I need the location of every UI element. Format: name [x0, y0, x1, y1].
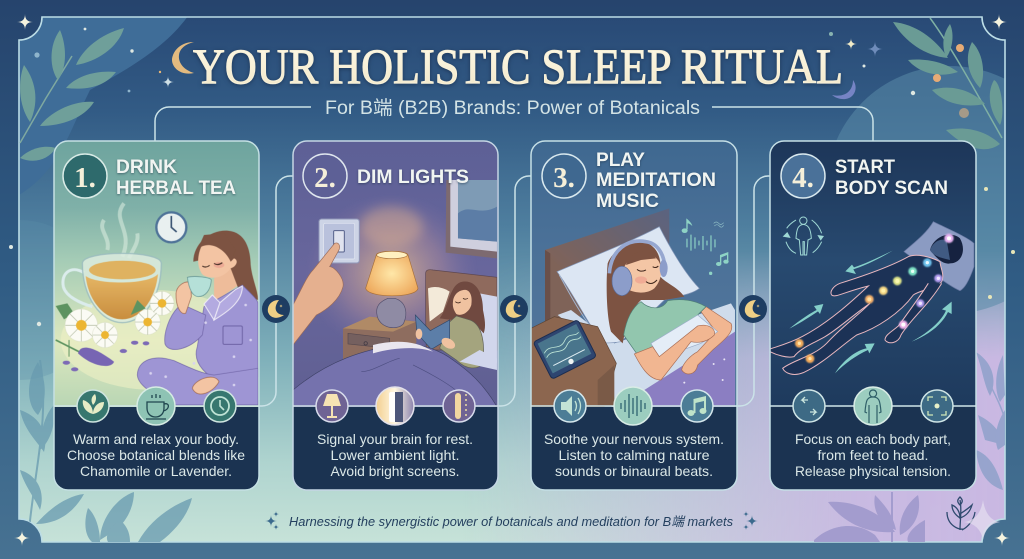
description text: Listen to calming nature [558, 447, 710, 463]
heading [835, 157, 948, 199]
heading: PLAY [596, 150, 645, 171]
heading: DIM LIGHTS [357, 167, 469, 188]
icon: lamp [316, 390, 348, 422]
icon: small blue crescent [832, 80, 856, 99]
icon: tea cup [137, 387, 175, 425]
number badge 2: 2. [314, 162, 336, 194]
botanical: top-right leaves [893, 18, 1002, 149]
footer tagline: Harnessing the synergistic power of botanicals and meditation for B端 markets [289, 514, 733, 529]
description text: Warm and relax your body. [73, 431, 239, 447]
panel: step 2 dim lights [293, 141, 498, 490]
heading: START [835, 157, 895, 178]
icon: directional arrows [793, 390, 825, 422]
illustration: woman with headphones in bed [531, 208, 735, 413]
caption panel [54, 407, 259, 490]
icon: speaker [554, 390, 586, 422]
description text: Signal your brain for rest. [317, 431, 473, 447]
subtitle: For B端 (B2B) Brands: Power of Botanicals [325, 97, 700, 119]
caption panel [531, 407, 737, 490]
illustration: body scan figure [770, 217, 974, 374]
decorative stars and dots [9, 28, 1015, 326]
connector lines [155, 107, 873, 406]
icon: footer sparkles left [265, 511, 279, 530]
panel: step 3 play meditation music [531, 141, 737, 490]
icon: music note [681, 390, 713, 422]
icon: sound wave [614, 387, 652, 425]
heading: MUSIC [596, 191, 659, 212]
caption panel [293, 407, 498, 490]
panel: step 4 start body scan [770, 141, 976, 490]
illustration: tea and woman in pajamas [56, 203, 258, 405]
description text: from feet to head. [818, 447, 928, 463]
panel: step 1 drink herbal tea [54, 141, 259, 490]
icon: footer sparkles right [743, 511, 758, 530]
description text: sounds or binaural beats. [555, 463, 713, 479]
botanical: bottom-left leaves [20, 360, 192, 542]
description text: Avoid bright screens. [330, 463, 460, 479]
botanical: bottom-right leaves [814, 492, 925, 542]
number badge 1: 1. [74, 162, 96, 194]
description text [544, 431, 724, 479]
heading: HERBAL TEA [116, 178, 236, 199]
number badge 2 [303, 154, 347, 198]
heading [596, 150, 716, 212]
number badge 3: 3. [553, 162, 575, 194]
number badge 4: 4. [792, 162, 814, 194]
icon: moon connector 3 [739, 295, 767, 323]
botanical: right-side leaves [976, 352, 1005, 490]
description text [67, 431, 245, 479]
heading: BODY SCAN [835, 178, 948, 199]
icon: slider [443, 390, 475, 422]
number badge 4 [781, 154, 825, 198]
description text: Release physical tension. [795, 463, 951, 479]
title: YOUR HOLISTIC SLEEP RITUAL [193, 38, 843, 94]
description text: Choose botanical blends like [67, 447, 245, 463]
heading [116, 157, 236, 199]
description text: Soothe your nervous system. [544, 431, 724, 447]
number badge 3 [542, 154, 586, 198]
icon: dimmer glow [376, 387, 414, 425]
description text [317, 431, 473, 479]
illustration: lamp and woman reading in bed [293, 180, 497, 417]
heading: DRINK [116, 157, 177, 178]
icon: clock [204, 390, 236, 422]
botanical: top-left leaves [20, 28, 124, 161]
number badge 1 [63, 154, 107, 198]
icon: focus target [921, 390, 953, 422]
icon: moon connector 1 [262, 295, 290, 323]
heading: MEDITATION [596, 170, 716, 191]
icon: title crescent moon [172, 42, 194, 74]
icon: body outline [854, 387, 892, 425]
description text: Focus on each body part, [795, 431, 951, 447]
icon: moon connector 2 [500, 295, 528, 323]
decorative large sparkle [964, 500, 1000, 540]
description text [795, 431, 951, 479]
icon: bottom-right botanical logo [947, 497, 975, 530]
description text: Lower ambient light. [330, 447, 460, 463]
icon: tea leaves [77, 390, 109, 422]
description text: Chamomile or Lavender. [80, 463, 232, 479]
caption panel [770, 407, 976, 490]
